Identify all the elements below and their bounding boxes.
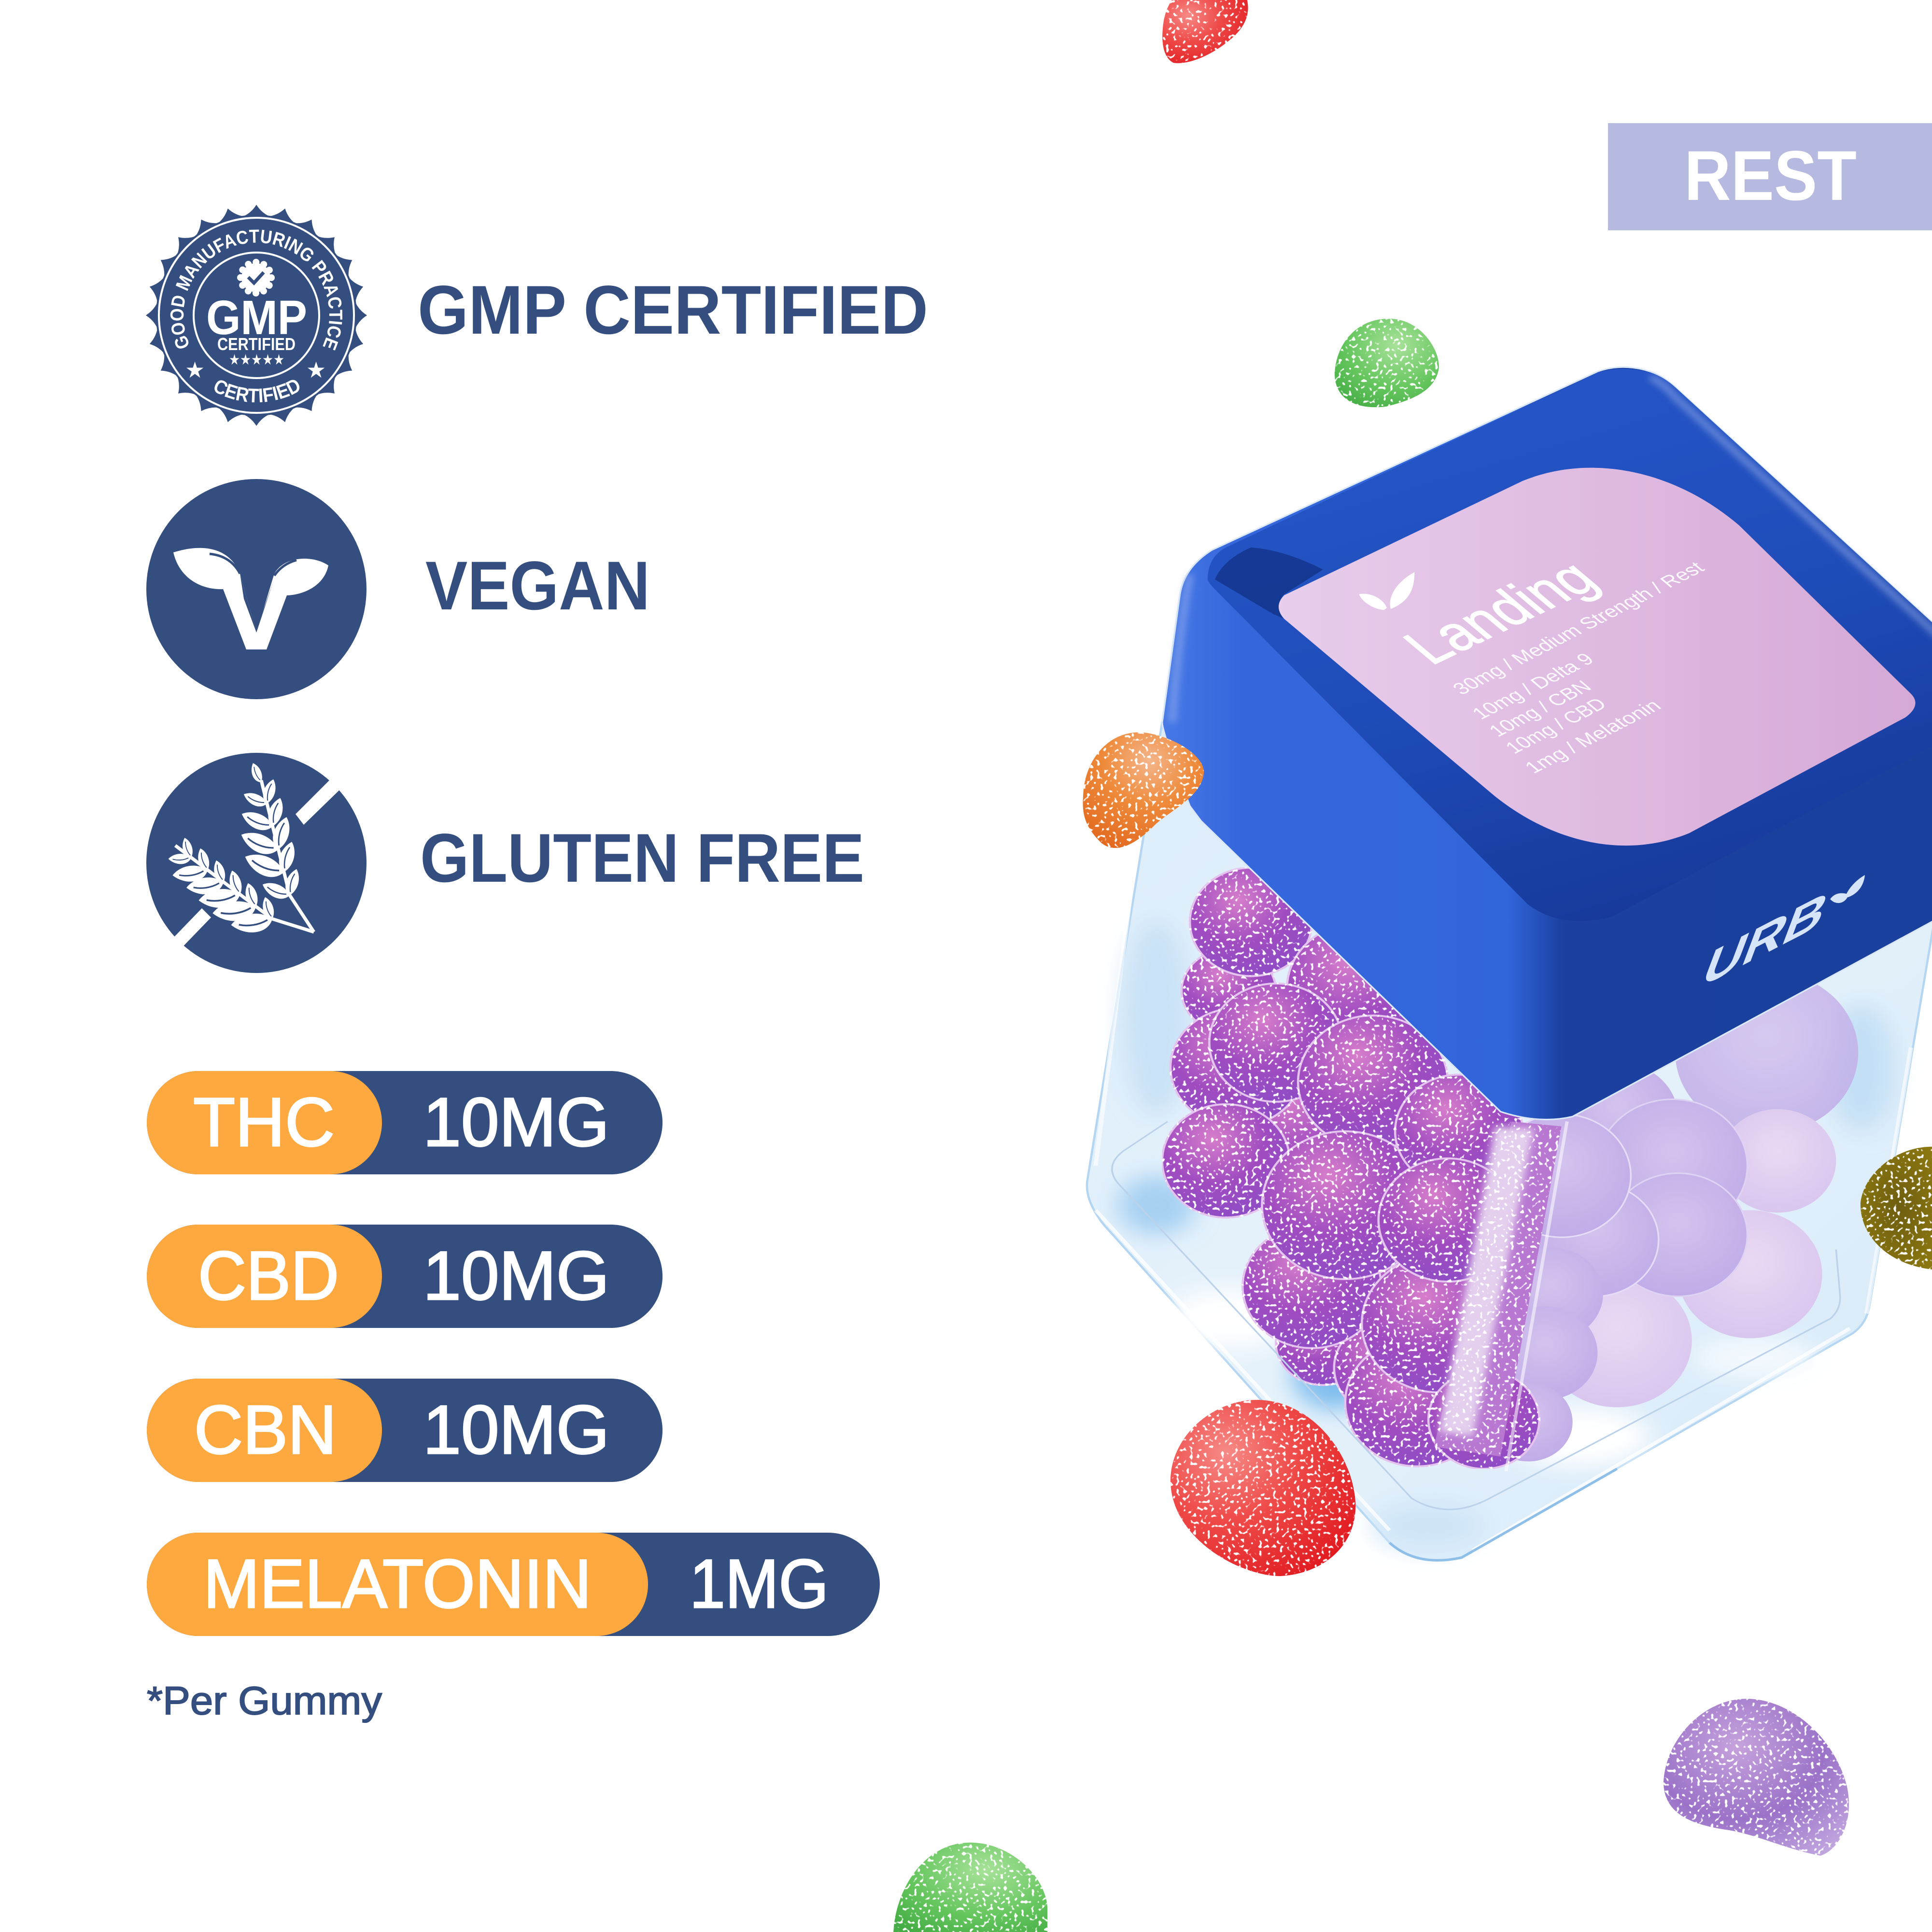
- label text: 10mg / CBN: [1484, 677, 1596, 740]
- badge: gluten free icon: [146, 753, 367, 973]
- pill: MELATONIN 1MG: [147, 1533, 880, 1636]
- pill: THC 10MG: THC: [193, 1084, 335, 1161]
- blue lid: [1162, 367, 1932, 1119]
- heading: GLUTEN FREE: GLUTEN FREE: [420, 820, 864, 897]
- pale lavender gummies: [1484, 971, 1858, 1462]
- gummy: green bottom: [893, 1843, 1047, 1932]
- badge: GMP certified seal: ★: [185, 357, 205, 382]
- label sticker: [1279, 468, 1916, 846]
- pill: CBD 10MG: 10MG: [423, 1238, 609, 1314]
- pill: MELATONIN 1MG: 1MG: [690, 1546, 829, 1622]
- pill: CBN 10MG: [147, 1379, 663, 1482]
- pill: THC 10MG: [147, 1071, 663, 1174]
- heading: GMP CERTIFIED: GMP CERTIFIED: [418, 272, 928, 349]
- badge: vegan icon: [146, 479, 367, 699]
- pill: CBD 10MG: CBD: [198, 1238, 339, 1314]
- jar glass body: [1087, 722, 1932, 1560]
- badge: GMP certified seal: CERTIFIED: [217, 334, 296, 354]
- pill: CBN 10MG: CBN: [194, 1392, 337, 1468]
- label text: 1mg / Melatonin: [1520, 696, 1666, 777]
- heading: VEGAN: VEGAN: [425, 548, 650, 624]
- label text: 10mg / Delta 9: [1467, 649, 1598, 723]
- badge: GMP certified seal: ★★★★★: [229, 352, 284, 368]
- gummy: purple: [1664, 1699, 1849, 1856]
- badge: GMP certified seal: ★: [306, 357, 326, 382]
- badge: GMP certified seal: GOOD MANUFACTURING PRACTICE: [167, 226, 346, 353]
- badge: GMP certified seal: CERTIFIED: [210, 374, 304, 407]
- label text: 30mg / Medium Strength / Rest: [1448, 558, 1709, 698]
- badge: GMP certified seal: [146, 205, 367, 426]
- gummy: dark yellow: [1861, 1147, 1932, 1270]
- label text: 10mg / CBD: [1500, 694, 1611, 757]
- footnote: per gummy: *Per Gummy: [147, 1679, 382, 1723]
- badge: GMP certified seal: GMP: [206, 291, 307, 345]
- gummy: red top: [1162, 0, 1248, 63]
- pill: CBN 10MG: 10MG: [423, 1392, 609, 1468]
- pill: CBD 10MG: [147, 1225, 663, 1328]
- label text: [1390, 550, 1709, 777]
- tag: REST: REST: [1684, 136, 1857, 215]
- gummy: red large: [1170, 1400, 1355, 1576]
- purple sugared gummies: [1162, 868, 1562, 1469]
- pill: THC 10MG: 10MG: [423, 1084, 609, 1161]
- gummy: orange: [1083, 732, 1204, 848]
- tag: REST: [1608, 123, 1932, 230]
- gummy: green upper: [1335, 319, 1439, 407]
- lid logo: URB: URB: [1694, 877, 1837, 999]
- label text: Landing: [1390, 550, 1611, 674]
- pill: MELATONIN 1MG: MELATONIN: [203, 1546, 592, 1622]
- glass edges and jar floor: [1096, 821, 1911, 1560]
- product: gummy jar: [1087, 367, 1932, 1560]
